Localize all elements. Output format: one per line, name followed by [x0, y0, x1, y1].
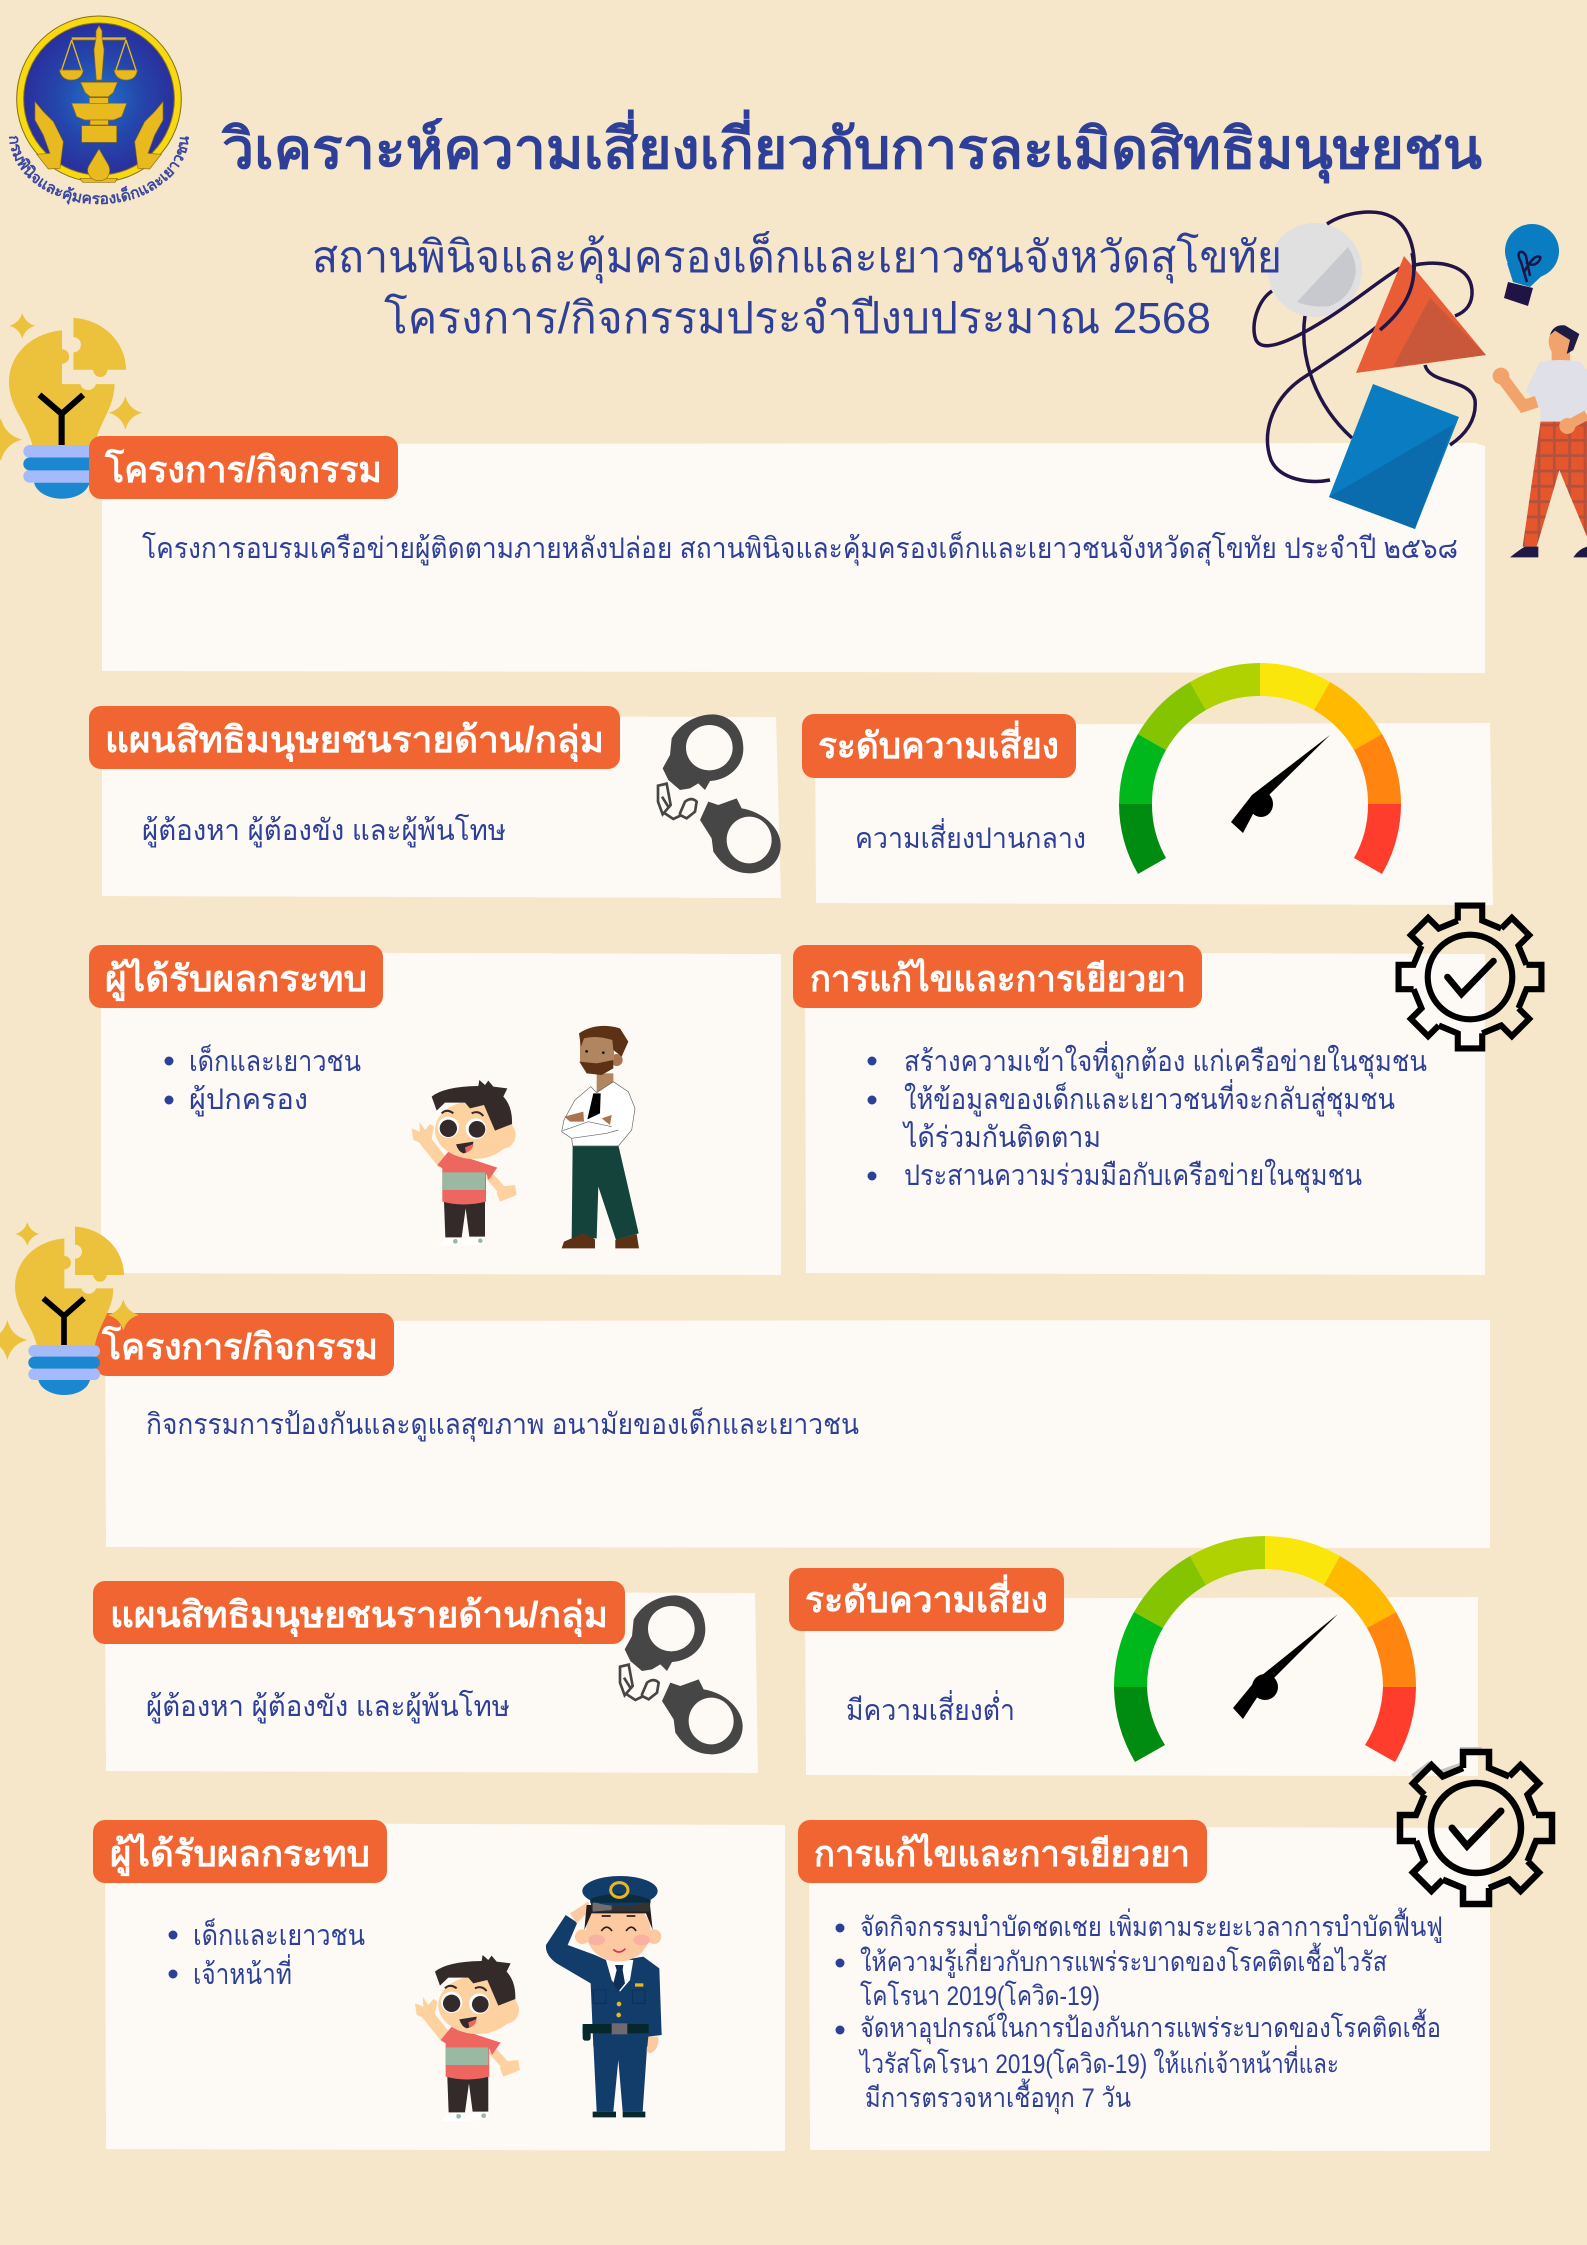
panel: project 1: [102, 443, 1485, 673]
text: plan 2: ผู้ต้องหา ผู้ต้องขัง และผู้พ้นโทษ: [146, 1689, 510, 1724]
illustration: parent: [562, 1026, 639, 1248]
panel: affected people 2: [105, 1823, 785, 2151]
list: remedies 2: ไวรัสโคโรนา 2019(โควิด-19) ให้แก่เจ้าหน้าที่และ: [858, 2045, 1339, 2079]
list: remedies 2: จัดหาอุปกรณ์ในการป้องกันการแพร่ระบาดของโรคติดเชื้อ: [860, 2008, 1441, 2045]
list: remedies 1: ได้ร่วมกันติดตาม: [902, 1120, 1101, 1154]
panel: human rights plan 1: [102, 715, 781, 898]
panel: risk level 1: [815, 723, 1493, 905]
badge: plan 2: [93, 1581, 625, 1644]
zigzag trace behind gear: [1413, 1750, 1482, 1777]
abstract shapes illustration: [1254, 212, 1486, 529]
icon: small blue bulb: [1504, 224, 1559, 306]
list: remedies 2: ให้ความรู้เกี่ยวกับการแพร่ระบาดของโรคติดเชื้อไวรัส: [860, 1942, 1387, 1978]
list: remedies 1: สร้างความเข้าใจที่ถูกต้อง แก่เครือข่ายในชุมชน: [904, 1041, 1427, 1079]
subtitle: [312, 231, 1282, 343]
list: affected 2: เด็กและเยาวชน: [193, 1917, 365, 1952]
badge: affected 2: [93, 1820, 387, 1883]
list: affected 2: [168, 1917, 365, 1991]
icon: lightbulb puzzle 2: [0, 1222, 139, 1395]
badge: affected 1: [89, 945, 383, 1008]
text: risk 2: มีความเสี่ยงต่ำ: [846, 1690, 1015, 1727]
badge: project 1: [89, 436, 398, 499]
badge: risk 2: [789, 1568, 1064, 1631]
panel: remedies 1: [805, 952, 1485, 1275]
badge: remedies 2: การแก้ไขและการเยียวยา: [814, 1832, 1190, 1874]
list: remedies 2: มีการตรวจหาเชื้อทุก 7 วัน: [865, 2078, 1131, 2115]
illustration: person looking at shapes: [1493, 325, 1587, 557]
panel: human rights plan 2: [105, 1591, 758, 1773]
panel: remedies 2: [809, 1826, 1490, 2151]
icon: handcuffs 2: [620, 1595, 743, 1754]
list: affected 1: เด็กและเยาวชน: [189, 1043, 361, 1078]
badge: remedies 2: [798, 1820, 1207, 1883]
text: plan 1: ผู้ต้องหา ผู้ต้องขัง และผู้พ้นโทษ: [142, 813, 506, 848]
text: project 1: โครงการอบรมเครือข่ายผู้ติดตามภายหลังปล่อย สถานพินิจและคุ้มครองเด็กและเยาวชนจังหวัดสุโขทัย ประจำปี ๒๕๖๘: [142, 530, 1458, 566]
illustration: child: [412, 1080, 517, 1246]
illustration: child 2: [415, 1955, 520, 2121]
list: remedies 2: โคโรนา 2019(โควิด-19): [860, 1981, 1100, 2011]
list: remedies 1: [868, 1041, 1427, 1193]
panel: risk level 2: [805, 1597, 1478, 1776]
panel: project 2: [105, 1320, 1490, 1548]
text: risk 1: ความเสี่ยงปานกลาง: [855, 818, 1086, 855]
badge: project 2: โครงการ/กิจกรรม: [101, 1325, 378, 1367]
badge: plan 1: แผนสิทธิมนุษยชนรายด้าน/กลุ่ม: [105, 719, 604, 763]
subtitle: โครงการ/กิจกรรมประจำปีงบประมาณ 2568: [384, 293, 1211, 343]
icon: handcuffs 1: [658, 714, 781, 873]
badge: risk 1: ระดับความเสี่ยง: [818, 720, 1059, 766]
subtitle: สถานพินิจและคุ้มครองเด็กและเยาวชนจังหวัดสุโขทัย: [312, 231, 1282, 284]
list: affected 1: ผู้ปกครอง: [189, 1084, 308, 1117]
text: project 2: กิจกรรมการป้องกันและดูแลสุขภาพ อนามัยของเด็กและเยาวชน: [146, 1406, 859, 1442]
list: affected 2: เจ้าหน้าที่: [193, 1954, 292, 1991]
gauge 1: [1119, 663, 1401, 874]
list: remedies 1: ประสานความร่วมมือกับเครือข่ายในชุมชน: [904, 1158, 1362, 1193]
badge: remedies 1: การแก้ไขและการเยียวยา: [810, 957, 1186, 999]
badge: affected 2: ผู้ได้รับผลกระทบ: [110, 1832, 370, 1877]
illustration: police officer: [546, 1876, 662, 2117]
badge: plan 2: แผนสิทธิมนุษยชนรายด้าน/กลุ่ม: [110, 1594, 608, 1638]
badge: plan 1: [89, 706, 620, 769]
badge: project 2: [95, 1313, 394, 1376]
icon: gear check 1: [1397, 904, 1543, 1050]
panel: affected people 1: [101, 952, 781, 1275]
list: affected 1: [164, 1043, 361, 1117]
badge: affected 1: ผู้ได้รับผลกระทบ: [105, 957, 367, 1002]
badge: risk 1: [802, 714, 1076, 778]
badge: risk 2: ระดับความเสี่ยง: [805, 1574, 1048, 1620]
list: remedies 1: ให้ข้อมูลของเด็กและเยาวชนที่จะกลับสู่ชุมชน: [904, 1079, 1395, 1117]
list: remedies 2: [836, 1907, 1443, 2115]
title: วิเคราะห์ความเสี่ยงเกี่ยวกับการละเมิดสิทธิมนุษยชน: [221, 109, 1482, 184]
badge: project 1: โครงการ/กิจกรรม: [104, 448, 382, 490]
icon: lightbulb puzzle 1: [0, 313, 142, 499]
gauge 2: [1114, 1536, 1416, 1762]
icon: gear check 2: [1399, 1751, 1553, 1905]
logo: [8, 16, 189, 205]
logo caption: กรมพินิจและคุ้มครองเด็กและเยาวชน: [8, 136, 189, 205]
badge: remedies 1: [793, 945, 1202, 1008]
list: remedies 2: จัดกิจกรรมบำบัดชดเชย เพิ่มตามระยะเวลาการบำบัดฟื้นฟู: [860, 1907, 1443, 1943]
